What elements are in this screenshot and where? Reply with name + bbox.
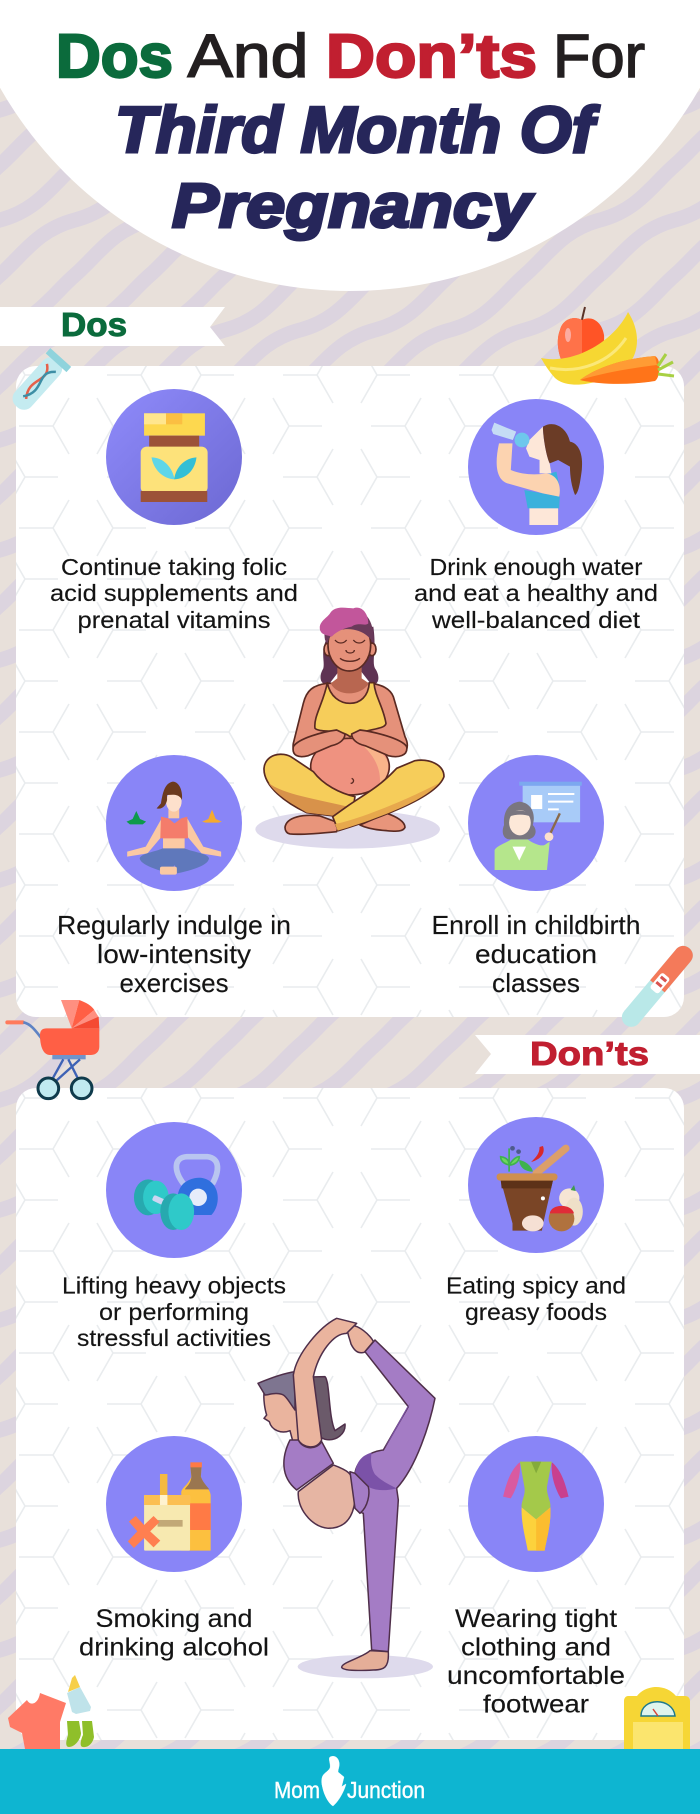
label: heavy lifting: stressful activities (77, 1325, 271, 1351)
label: childbirth classes: classes (492, 968, 580, 998)
label: water and diet: and eat a healthy and (414, 580, 658, 606)
logo: MomJunction (274, 1756, 425, 1806)
label: heavy lifting: Lifting heavy objects (62, 1272, 286, 1298)
label: tight clothing: clothing and (461, 1634, 611, 1662)
label: smoking and alcohol: Smoking and (96, 1605, 252, 1633)
label: folic acid (50, 554, 298, 633)
label: tight clothing (447, 1605, 625, 1718)
circle icon: supplement jar (106, 389, 242, 525)
panel: dos card (6, 307, 697, 1031)
decoration: red stroller (7, 1000, 99, 1099)
logo: MomJunction: Junction (347, 1777, 425, 1803)
circle icon: weights (106, 1122, 242, 1258)
label: water and diet (414, 554, 658, 633)
label: tight clothing: Wearing tight (455, 1605, 617, 1633)
label: exercises: Regularly indulge in (57, 910, 291, 940)
decoration: apple, banana and carrot (541, 307, 674, 385)
circle icon: woman meditating (106, 755, 242, 891)
panel: don'ts card (0, 1000, 700, 1814)
illustration: pregnant woman in dancer yoga pose (258, 1318, 435, 1678)
label: childbirth classes: Enroll in childbirth (432, 910, 640, 940)
ribbon: Don'ts (475, 1035, 700, 1074)
label: smoking and alcohol (79, 1605, 269, 1662)
label: spicy food: greasy foods (465, 1299, 607, 1325)
decoration: pregnancy test (618, 942, 697, 1031)
title: Pregnancy (172, 172, 535, 241)
circle icon: tight dress (468, 1436, 604, 1572)
logo: MomJunction: Mom (274, 1777, 320, 1803)
title: Don’ts (326, 22, 537, 90)
label: exercises: exercises (120, 968, 228, 998)
circle icon: cigarettes and alcohol (106, 1436, 242, 1572)
label: spicy food: Eating spicy and (446, 1272, 626, 1298)
label: water and diet: well-balanced diet (431, 607, 641, 633)
label: heavy lifting (62, 1272, 286, 1351)
label: tight clothing: uncomfortable (447, 1662, 625, 1690)
label: water and diet: Drink enough water (430, 554, 643, 580)
title: Third Month Of (115, 93, 601, 166)
header white arc (0, 0, 700, 291)
label: spicy food (446, 1272, 626, 1325)
title: Dos (56, 22, 173, 90)
illustration: pregnant woman sitting cross-legged (255, 608, 444, 849)
label: folic acid: Continue taking folic (61, 554, 287, 580)
circle icon: spices in mortar (468, 1117, 604, 1253)
label: smoking and alcohol: drinking alcohol (79, 1634, 269, 1662)
title: For (553, 22, 645, 90)
label: exercises (57, 910, 291, 998)
label: childbirth classes (432, 910, 640, 998)
circle icon: woman drinking water (468, 399, 604, 535)
decoration: weighing scale (624, 1687, 690, 1749)
label: childbirth classes: education (475, 939, 597, 969)
decoration: DNA test tube (6, 348, 71, 416)
label: exercises: low-intensity (97, 939, 251, 969)
footer band (0, 1749, 700, 1814)
label: tight clothing: footwear (483, 1690, 589, 1718)
title: And (188, 22, 308, 90)
ribbon: Dos: Dos (61, 306, 127, 343)
ribbon: Don'ts: Don’ts (530, 1035, 649, 1072)
label: folic acid: acid supplements and (50, 580, 298, 606)
circle icon: teacher at board (468, 755, 604, 891)
label: heavy lifting: or performing (99, 1299, 249, 1325)
decoration: onesie, bottle and socks (8, 1675, 94, 1749)
ribbon: Dos (0, 306, 225, 346)
title (56, 22, 645, 241)
label: folic acid: prenatal vitamins (78, 607, 270, 633)
